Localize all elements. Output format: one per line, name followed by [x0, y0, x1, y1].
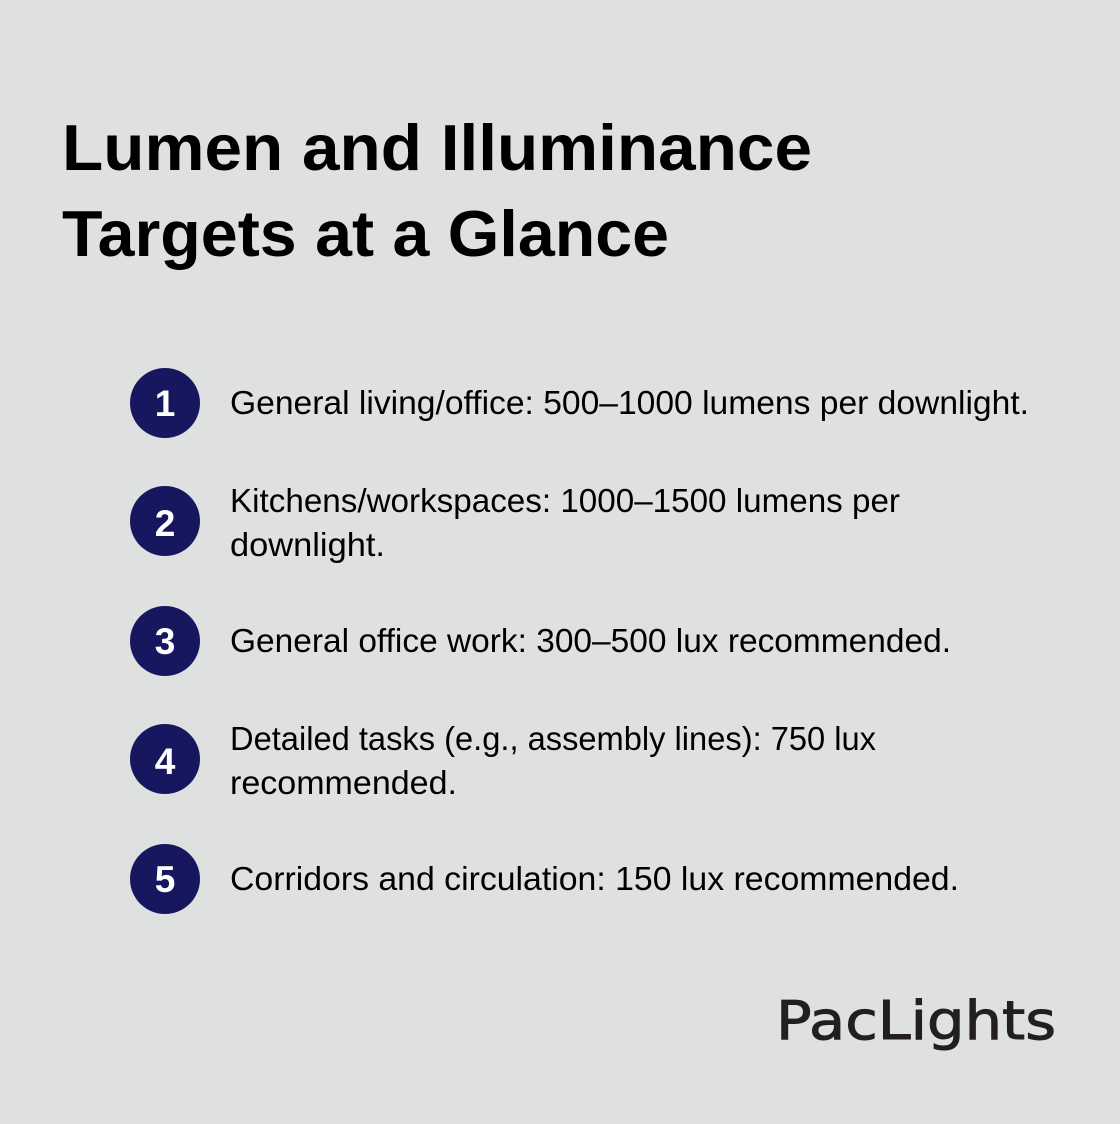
- list item 2: [130, 482, 900, 563]
- title: Targets at a Glance: [62, 197, 669, 270]
- number badge 1: 1: [155, 383, 175, 424]
- number badge 2: 2: [155, 503, 175, 544]
- number badge 5: 5: [155, 859, 175, 900]
- item 4 text: [230, 720, 876, 801]
- item 2 text: Kitchens/workspaces: 1000–1500 lumens per: [230, 482, 900, 519]
- item 2 text: [230, 482, 900, 563]
- logo: PacLights: PacLights: [776, 989, 1056, 1052]
- item 4 text: recommended.: [230, 764, 457, 801]
- title: Lumen and Illuminance: [62, 111, 812, 184]
- list item 5: [130, 844, 959, 914]
- item 2 text: downlight.: [230, 526, 385, 563]
- item 1 text: General living/office: 500–1000 lumens per downlight.: [230, 384, 1029, 421]
- list item 4: [130, 720, 876, 801]
- number badge 3: 3: [155, 621, 175, 662]
- item 4 text: Detailed tasks (e.g., assembly lines): 750 lux: [230, 720, 876, 757]
- number badge 4: [130, 724, 200, 794]
- number badge 2: [130, 486, 200, 556]
- list item 3: [130, 606, 951, 676]
- number badge 5: [130, 844, 200, 914]
- list item 1: [130, 368, 1029, 438]
- number badge 1: [130, 368, 200, 438]
- item 3 text: General office work: 300–500 lux recommended.: [230, 622, 951, 659]
- number badge 3: [130, 606, 200, 676]
- item 5 text: Corridors and circulation: 150 lux recommended.: [230, 860, 959, 897]
- title: [62, 111, 812, 270]
- number badge 4: 4: [155, 741, 176, 782]
